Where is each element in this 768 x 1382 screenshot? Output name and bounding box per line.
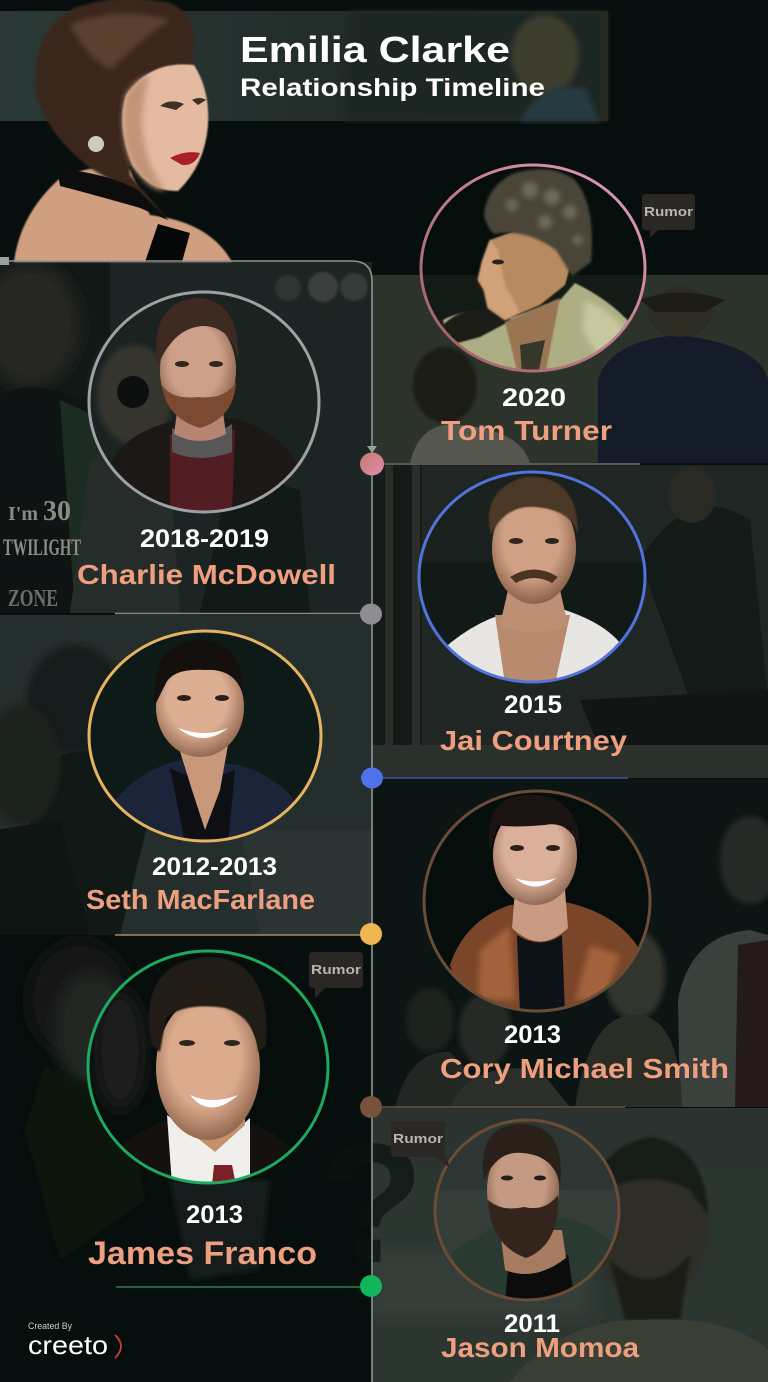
node: 2013 Cory [360, 1096, 382, 1118]
eyes [509, 538, 523, 544]
portrait: Charlie McDowell [88, 292, 320, 515]
photo: Emilia Clarke [14, 0, 232, 262]
node: 2020 [360, 452, 384, 476]
moustache [510, 570, 558, 583]
jacket [111, 418, 298, 507]
eye [492, 260, 504, 264]
lips [170, 152, 200, 165]
leather jacket [450, 902, 645, 1013]
title: Emilia Clarke [240, 29, 510, 70]
beard [488, 1195, 558, 1258]
name: Seth MacFarlane: Seth MacFarlane [86, 884, 315, 915]
smile [178, 728, 228, 738]
eyes [175, 361, 189, 367]
neck [174, 414, 226, 441]
face [493, 805, 577, 905]
name: James Franco: James Franco [88, 1235, 317, 1271]
choker [58, 168, 168, 220]
hair [154, 640, 243, 705]
node: 2013 Franco [360, 1275, 382, 1297]
node: 2012-2013 [360, 923, 382, 945]
neck [172, 1105, 245, 1152]
white jacket [448, 610, 619, 678]
background panel: Charlie McDowell scene [0, 262, 372, 613]
face [156, 670, 244, 757]
neck [500, 1230, 566, 1274]
portrait: Seth MacFarlane [88, 631, 322, 843]
background panel: Jason Momoa scene [372, 1108, 768, 1382]
neck [178, 745, 228, 830]
eyes [510, 845, 524, 851]
dress strap [145, 224, 190, 262]
face [122, 64, 208, 191]
background panel: Charlie McDowell scene: I'm 30 [8, 496, 71, 527]
eyes [501, 1176, 513, 1180]
hair [489, 795, 580, 850]
smile [190, 1095, 238, 1108]
face [487, 1140, 559, 1240]
rumor tag: Jason Momoa [391, 1121, 450, 1168]
rumor tag: James Franco: Rumor [311, 962, 361, 977]
eyes [179, 1040, 195, 1046]
rumor tag: Tom Turner: Rumor [644, 204, 693, 219]
background panel: Tom Turner scene [372, 275, 768, 463]
background panel: James Franco scene [34, 946, 270, 1280]
suit [122, 1120, 292, 1185]
year: 2012-2013: 2012-2013 [152, 853, 277, 881]
name: Charlie McDowell: Charlie McDowell [77, 559, 336, 590]
neck and back [14, 167, 232, 262]
year: 2020: 2020 [502, 384, 566, 412]
creator credit: Created By [28, 1321, 72, 1331]
name: Jason Momoa: Jason Momoa [441, 1332, 639, 1363]
eyes [177, 695, 191, 701]
portrait: Jai Courtney [419, 472, 647, 684]
shirt [167, 1115, 250, 1185]
portrait: James Franco [87, 951, 329, 1185]
portrait: Jason Momoa [435, 1120, 621, 1302]
suit [115, 760, 300, 843]
background panel: Charlie McDowell scene: ZONE [8, 586, 58, 612]
face [156, 996, 260, 1140]
name: Tom Turner: Tom Turner [441, 415, 612, 446]
year: 2015: 2015 [504, 691, 562, 719]
hair [149, 957, 266, 1052]
earring [88, 136, 104, 152]
shirt [170, 768, 235, 843]
background panel: Jai Courtney scene [372, 465, 768, 778]
neck and chest [505, 298, 560, 375]
rumor tag: Tom Turner [642, 194, 695, 238]
background panel: Charlie McDowell scene: TWILIGHT [3, 535, 81, 560]
year: 2013 (Cory Michael Smith): 2013 [504, 1021, 561, 1049]
creator credit: creeto [28, 1330, 108, 1360]
creator credit [28, 1321, 121, 1360]
tie [212, 1165, 236, 1185]
neck [512, 890, 568, 942]
beard [162, 382, 236, 428]
jacket [443, 283, 632, 375]
node: 2015 [361, 768, 383, 788]
name: Jai Courtney: Jai Courtney [440, 725, 627, 756]
timeline nodes [360, 452, 384, 1297]
year: 2013 (James Franco): 2013 [186, 1201, 243, 1229]
smile [515, 878, 556, 886]
question mark watermark: ? [320, 1109, 424, 1299]
hair [35, 0, 194, 220]
curly hair [484, 169, 592, 276]
face [477, 232, 570, 321]
face [492, 506, 576, 604]
chest [495, 615, 570, 684]
portrait: Cory Michael Smith [424, 791, 650, 1013]
hair [483, 1124, 561, 1185]
year: 2018-2019: 2018-2019 [140, 525, 269, 553]
subtitle: Relationship Timeline [240, 74, 545, 102]
t-shirt [505, 1255, 575, 1302]
jacket [451, 1218, 612, 1302]
neck [502, 592, 568, 626]
year: 2011: 2011 [504, 1310, 560, 1338]
eyes [160, 101, 184, 110]
background panel: Cory Michael Smith scene [395, 812, 768, 1107]
hair [489, 477, 578, 535]
background panel: Seth MacFarlane scene [0, 615, 372, 935]
header band [0, 11, 608, 121]
rumor tag: James Franco [309, 952, 363, 998]
node: 2018-2019 [360, 604, 382, 624]
rumor tag: Jason Momoa: Rumor [393, 1131, 443, 1146]
name: Cory Michael Smith: Cory Michael Smith [440, 1053, 729, 1084]
timeline connector [0, 257, 640, 1382]
face [160, 326, 236, 398]
portrait: Tom Turner [420, 164, 648, 375]
t-shirt [517, 935, 565, 1013]
hair [156, 298, 238, 365]
